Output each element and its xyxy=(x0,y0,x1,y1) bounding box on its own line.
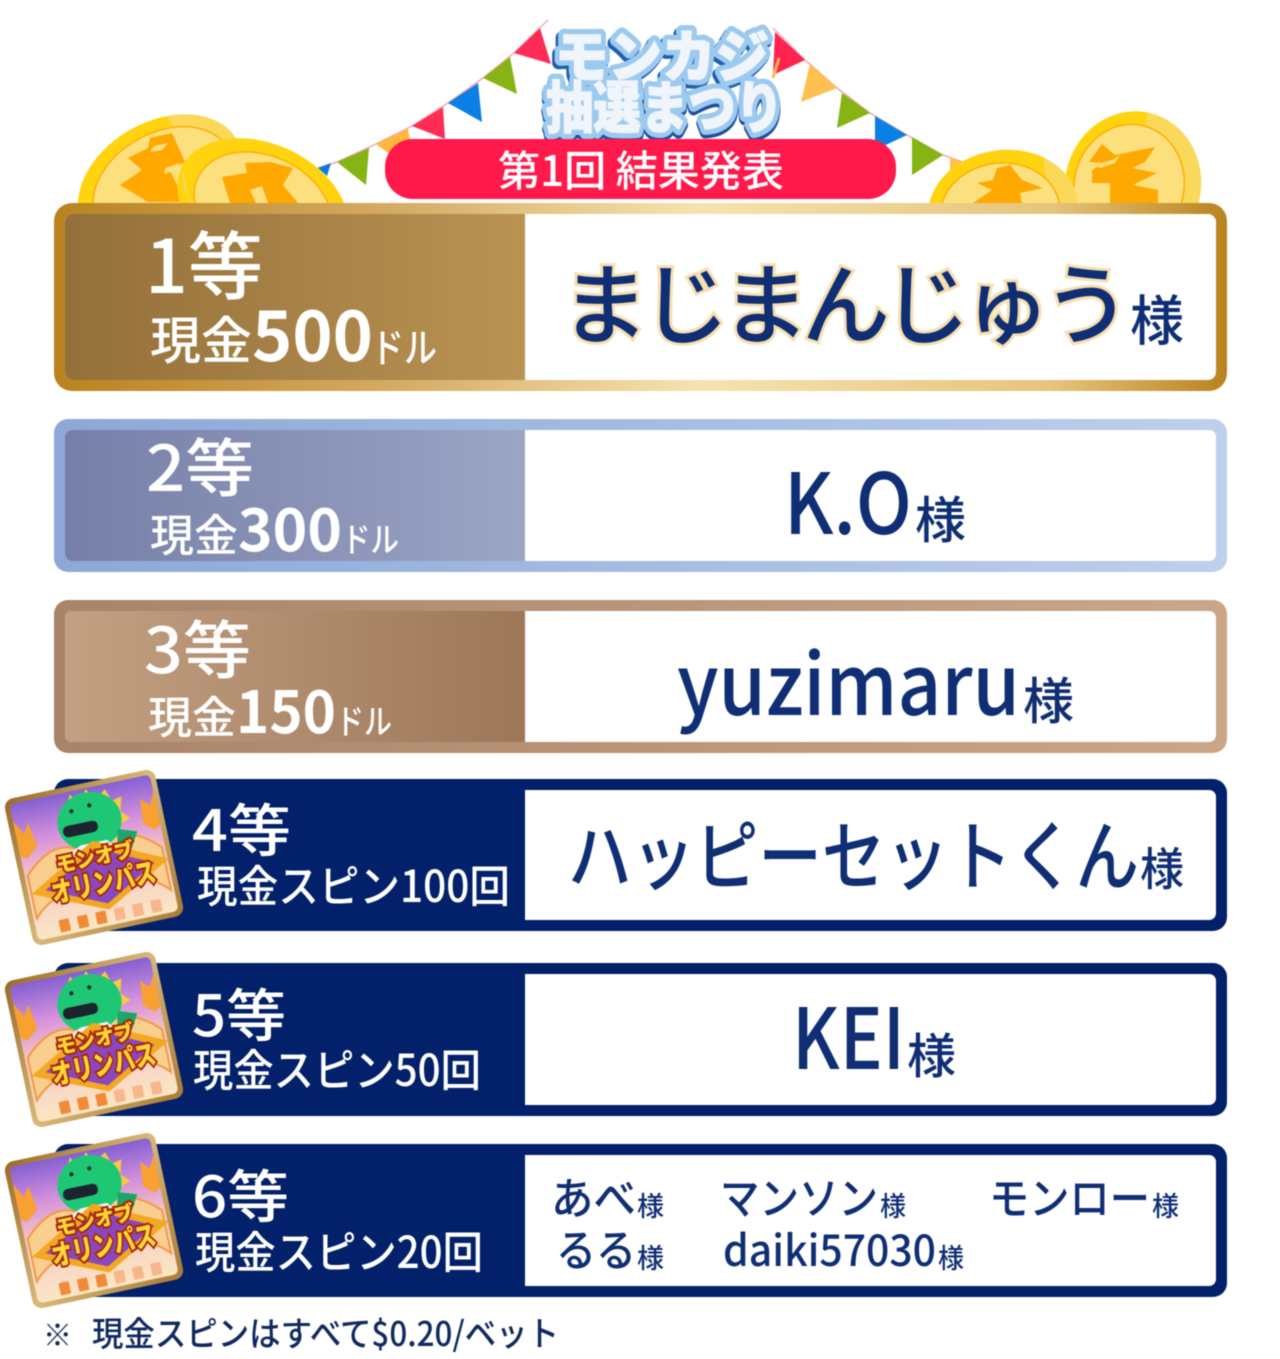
panel: 5th prize xyxy=(54,963,1227,1116)
6th prize winners list: 様 xyxy=(938,1237,964,1276)
3rd prize amount: 150 xyxy=(236,666,336,750)
6th prize winners list: daiki57030 xyxy=(723,1217,936,1279)
icon: game thumbnail, 5th prize xyxy=(3,950,185,1129)
5th prize rank: 5等 xyxy=(192,971,286,1053)
1st prize amount: 現金 xyxy=(150,300,252,374)
1st prize winner: まじまんじゅう xyxy=(561,236,1131,363)
6th prize winners list xyxy=(551,1163,1179,1279)
header: red result banner xyxy=(385,138,896,199)
header: logo モンカジ抽選まつり: 抽選まつり xyxy=(546,67,783,148)
icon: game thumbnail, 4th prize xyxy=(3,768,185,947)
6th prize amount: 現金スピン20回 xyxy=(195,1217,483,1281)
3rd prize winner: yuzimaru xyxy=(677,619,1020,740)
panel: 1st prize xyxy=(54,203,1227,391)
6th prize winners list: 様 xyxy=(637,1237,664,1276)
1st prize amount xyxy=(150,282,437,381)
4th prize amount: 現金スピン100回 xyxy=(197,851,510,915)
3rd prize rank: 3等 xyxy=(144,601,251,692)
header: logo モンカジ抽選まつり: モンカジ xyxy=(555,13,769,94)
icon: game thumbnail, 5th prize: オリンパス xyxy=(47,1032,159,1094)
4th prize winner: 様 xyxy=(1140,833,1184,898)
header: logo モンカジ抽選まつり xyxy=(539,10,783,151)
3rd prize winner: 様 xyxy=(1023,662,1074,734)
header: left gold coins xyxy=(77,114,344,204)
2nd prize amount: 300 xyxy=(238,484,342,568)
1st prize rank: 1等 xyxy=(145,208,263,315)
5th prize winner: 様 xyxy=(907,1017,956,1087)
panel: 3rd prize xyxy=(54,600,1227,753)
5th prize amount: 現金スピン50回 xyxy=(193,1035,481,1099)
icon: game thumbnail, 6th prize: オリンパス xyxy=(47,1213,159,1275)
4th prize winner: ハッピーセットくん xyxy=(568,796,1139,906)
6th prize winners list: マンソン xyxy=(720,1163,878,1227)
6th prize winners list: モンロー xyxy=(989,1163,1150,1227)
2nd prize amount: ドル xyxy=(342,513,399,562)
icon: game thumbnail, 4th prize: モンオブ xyxy=(53,833,137,878)
header: logo モンカジ抽選まつり: 抽選まつり xyxy=(546,64,783,145)
6th prize winners list: 様 xyxy=(1152,1185,1179,1224)
6th prize winners list: 様 xyxy=(880,1185,906,1224)
icon: game thumbnail, 6th prize xyxy=(3,1131,185,1310)
footnote: ※ xyxy=(43,1311,72,1355)
header: right gold coins xyxy=(928,110,1202,204)
1st prize amount: 500 xyxy=(252,282,373,381)
icon: game thumbnail, 4th prize: オリンパス xyxy=(47,850,159,912)
2nd prize winner: 様 xyxy=(915,481,966,553)
1st prize winner: 様 xyxy=(1130,277,1184,356)
header: logo モンカジ抽選まつり: モンカジ xyxy=(553,16,767,97)
2nd prize amount: 現金 xyxy=(150,500,238,564)
1st prize amount: ドル xyxy=(371,316,437,374)
3rd prize amount: ドル xyxy=(336,695,392,744)
header: logo モンカジ抽選まつり: モンカジ xyxy=(555,13,769,94)
6th prize winners list: るる xyxy=(556,1215,636,1279)
header: logo モンカジ抽選まつり: 抽選まつり xyxy=(546,64,783,145)
4th prize rank: 4等 xyxy=(192,786,291,868)
3rd prize amount: 現金 xyxy=(148,682,236,746)
footnote: 現金スピンはすべて$0.20/ベット xyxy=(92,1307,559,1356)
6th prize winners list: あべ xyxy=(551,1163,636,1227)
header: red result banner: 第1回 結果発表 xyxy=(498,138,784,199)
panel: 4th prize xyxy=(54,779,1227,931)
5th prize winner: KEI xyxy=(792,973,905,1094)
icon: game thumbnail, 6th prize: モンオブ xyxy=(53,1196,137,1241)
6th prize winners list: 様 xyxy=(637,1185,664,1224)
header: festival bunting flags xyxy=(318,20,968,185)
6th prize rank: 6等 xyxy=(192,1152,289,1234)
2nd prize winner: K.O xyxy=(784,438,912,559)
panel: 2nd prize xyxy=(54,419,1227,572)
2nd prize amount xyxy=(150,484,399,568)
panel: 6th prize xyxy=(54,1144,1227,1297)
3rd prize amount xyxy=(148,666,392,750)
2nd prize rank: 2等 xyxy=(146,419,254,510)
icon: game thumbnail, 5th prize: モンオブ xyxy=(53,1015,137,1060)
